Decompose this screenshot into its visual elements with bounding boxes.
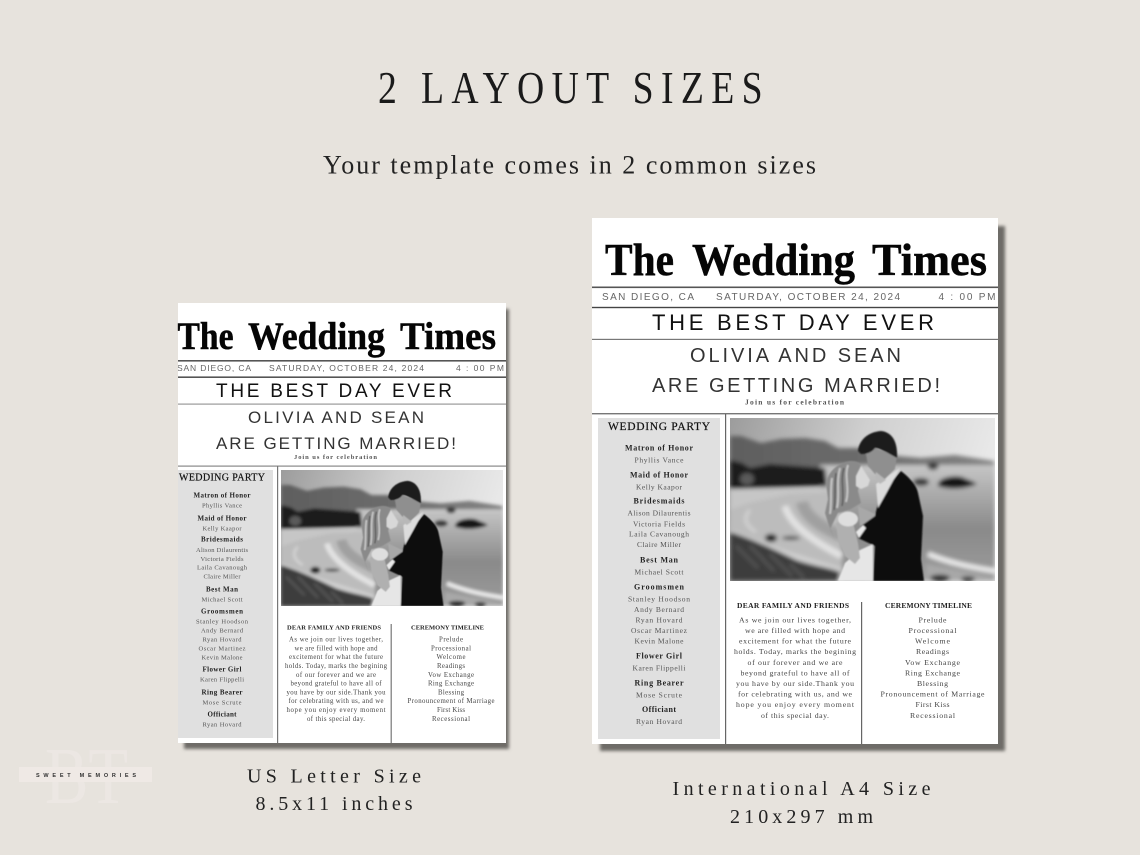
wedding party column: Claire Miller [204,574,241,580]
letter column: As we join our lives together, [739,616,851,624]
letter column: for celebrating with us, and we [738,690,853,698]
letter column: excitement for what the future [739,636,852,646]
wedding party column: WEDDING PARTY [608,421,711,433]
ceremony timeline column: Ring Exchange [428,680,474,688]
announcement: ARE GETTING MARRIED! [652,375,940,397]
wedding party column: Laila Cavanough [197,564,248,572]
ceremony timeline column: CEREMONY TIMELINE [411,624,484,632]
wedding party column: Kelly Kaapor [636,482,682,492]
wedding party column: Ring Bearer [634,678,684,688]
watermark logo: BT [45,733,128,821]
date line: 4 : 00 PM [456,363,504,373]
ceremony timeline column: First Kiss [437,707,465,714]
letter column: we are filled with hope and [294,646,378,652]
letter column: of this special day. [761,711,829,720]
letter column: DEAR FAMILY AND FRIENDS [287,624,381,632]
letter column: As we join our lives together, [289,636,383,644]
wedding party column: Bridesmaids [201,536,243,544]
photo: couple on the beach [730,418,995,582]
ceremony timeline column: Prelude [918,616,947,624]
masthead: The [605,234,674,285]
ceremony timeline column: Vow Exchange [428,672,474,679]
invitation line: Join us for celebration [294,454,377,461]
wedding party column: Flower Girl [202,666,242,674]
caption: US Letter size: US Letter Size [247,766,421,788]
masthead: Times [872,234,987,285]
subtitle: Your template comes in 2 common sizes [323,150,816,180]
date line: SATURDAY, OCTOBER 24, 2024 [269,363,424,373]
letter column: of this special day. [307,716,365,723]
wedding party column: Ryan Hovard [202,636,242,644]
masthead: Times [400,315,496,358]
wedding party column: Best Man [206,586,238,594]
letter column: you have by our side.Thank you [736,679,854,688]
date line [178,365,504,372]
wedding party column: Officiant [208,710,237,718]
couple names: OLIVIA AND SEAN [248,408,424,427]
wedding party column: Matron of Honor [625,444,693,452]
letter column [734,601,856,720]
ceremony timeline column: Ring Exchange [905,668,961,678]
ceremony timeline column: Vow Exchange [905,658,961,667]
masthead: Wedding [692,234,855,285]
wedding party column: Victoria Fields [200,556,244,563]
caption: A4 size [672,778,931,828]
wedding party column: Kelly Kaapor [202,526,242,532]
date line: SATURDAY, OCTOBER 24, 2024 [716,292,900,303]
wedding party column: Stanley Hoodson [196,618,249,626]
ceremony timeline column: Prelude [439,636,463,644]
canvas [36,72,1008,823]
ceremony timeline column [408,624,494,723]
headline: THE BEST DAY EVER [216,381,452,402]
ceremony timeline column: Processional [431,646,471,652]
wedding party column: Maid of Honor [198,514,246,522]
wedding party column: Karen Flippelli [632,664,686,672]
caption: A4 size: 210x297 mm [730,806,873,828]
photo: couple on the beach [281,470,503,606]
wedding party column: Flower Girl [636,652,683,660]
letter column: beyond grateful to have all of [290,680,382,688]
wedding party column: Alison Dilaurentis [628,508,691,518]
wedding party column: Groomsmen [634,582,685,592]
wedding party column: Michael Scott [634,568,684,576]
wedding party column: Victoria Fields [633,520,685,528]
letter column: holds. Today, marks the begining [734,647,856,656]
wedding party column: Groomsmen [201,608,243,616]
wedding party column: Laila Cavanough [629,530,689,538]
wedding party column: Bridesmaids [634,496,684,506]
wedding party column: Officiant [642,705,676,714]
masthead: Wedding [248,315,385,358]
letter column: we are filled with hope and [745,626,845,635]
ceremony timeline column: Readings [916,647,949,656]
wedding party column: Andy Bernard [634,605,684,614]
masthead: The [178,315,234,358]
wedding party column: Best Man [640,556,679,564]
masthead [178,315,496,358]
ceremony timeline column: Blessing [438,690,465,696]
letter column: hope you enjoy every moment [736,700,855,709]
ceremony timeline column: Recessional [432,716,470,723]
ceremony timeline column: Pronouncement of Marriage [880,690,985,698]
wedding party column: Andy Bernard [201,628,244,634]
couple names: OLIVIA AND SEAN [690,345,901,367]
caption: US Letter size [247,766,421,815]
letter column: of our forever and we are [748,658,843,667]
wedding party column: Ryan Hovard [636,717,682,726]
panel: US Letter newspaper template [177,303,509,749]
letter column: beyond grateful to have all of [740,668,850,678]
wedding party column: Ryan Hovard [202,722,242,728]
wedding party column: WEDDING PARTY [179,472,265,484]
caption: A4 size: International A4 Size [672,778,931,800]
wedding party column: Mose Scrute [202,700,242,706]
date line: SAN DIEGO, CA [177,363,251,373]
wedding party column: Phyllis Vance [202,502,242,510]
title: 2 LAYOUT SIZES [378,64,763,114]
ceremony timeline column: Processional [908,626,957,635]
ceremony timeline column: Welcome [915,636,951,646]
wedding party column: Stanley Hoodson [628,594,690,604]
date line: 4 : 00 PM [938,292,996,303]
masthead [605,234,987,285]
ceremony timeline column [880,601,985,720]
ceremony timeline column: Readings [437,663,465,670]
letter column: holds. Today, marks the begining [285,663,388,670]
wedding party column: Ryan Hovard [636,616,683,624]
ceremony timeline column: Blessing [917,679,948,688]
headline: THE BEST DAY EVER [652,310,934,335]
caption: US Letter size: 8.5x11 inches [256,793,413,815]
letter column [285,624,388,723]
ceremony timeline column: Pronouncement of Marriage [408,698,494,705]
wedding party column: Alison Dilaurentis [196,547,248,554]
letter column: hope you enjoy every moment [286,707,386,714]
wedding party column: Kevin Malone [634,636,684,646]
wedding party column [598,418,720,739]
wedding party column: Michael Scott [202,596,243,604]
wedding party column: Karen Flippelli [200,676,244,684]
letter column: for celebrating with us, and we [288,698,384,705]
wedding party column: Matron of Honor [194,492,250,500]
letter column: excitement for what the future [289,654,383,661]
wedding party column: Claire Miller [637,540,682,549]
letter column: of our forever and we are [296,672,376,679]
panel: International A4 newspaper template [592,218,1005,751]
wedding party column: Ring Bearer [202,688,242,696]
ceremony timeline column: CEREMONY TIMELINE [885,601,972,610]
announcement: ARE GETTING MARRIED! [216,434,456,453]
wedding party column: Phyllis Vance [634,456,684,464]
invitation line: Join us for celebration [745,398,845,406]
wedding party column: Oscar Martinez [631,626,688,635]
ceremony timeline column: First Kiss [916,700,950,709]
wedding party column: Kevin Malone [202,654,243,662]
date line [602,292,996,303]
wedding party column: Mose Scrute [636,690,683,700]
wedding party column: Maid of Honor [630,470,688,480]
letter column: you have by our side.Thank you [286,690,386,696]
date line: SAN DIEGO, CA [602,292,694,303]
wedding party column [178,470,273,738]
ceremony timeline column: Welcome [436,654,466,661]
wedding party column: Oscar Martinez [198,646,246,652]
letter column: DEAR FAMILY AND FRIENDS [737,601,849,610]
ceremony timeline column: Recessional [910,711,956,720]
watermark logo: SWEET MEMORIES [36,773,136,779]
